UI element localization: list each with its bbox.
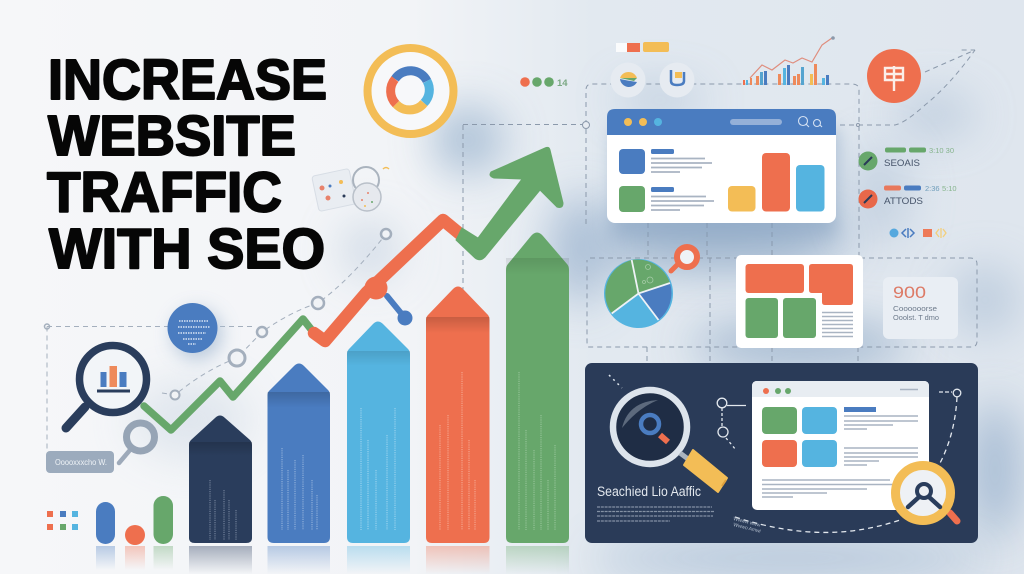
legend item: seoais: 3:10 30 [929, 146, 954, 155]
grey label [46, 451, 114, 473]
results window [752, 381, 929, 510]
bar: orange [426, 286, 490, 574]
status dots: 14 [557, 78, 568, 89]
bar: cyan [347, 322, 410, 574]
panel caption [597, 507, 714, 521]
title: TRAFFIC [47, 160, 282, 224]
orange round icon [867, 49, 921, 103]
curve note: Wwww www [733, 516, 761, 529]
icon: grey magnifier [119, 423, 154, 463]
curve note [733, 516, 761, 535]
title [47, 48, 327, 280]
icon: card and padlock [312, 167, 389, 212]
top color chips [616, 42, 669, 52]
connector nodes [717, 389, 961, 532]
title: WEBSITE [48, 104, 296, 167]
trend arrow [144, 147, 563, 430]
legend icons [890, 228, 946, 238]
small pills and dots [47, 496, 173, 570]
legend item: attods: ATTODS [884, 196, 923, 207]
legend item: attods: 2:36 [925, 184, 940, 193]
round icons [610, 62, 694, 98]
stat card [883, 277, 958, 339]
stat card: Coooooorse [893, 304, 937, 313]
bar: navy [189, 416, 252, 574]
stat card: Ooolst. T dmo [893, 313, 939, 322]
legend item: attods: 5:10 [942, 184, 957, 193]
legend item: attods [858, 184, 957, 208]
search magnifier [609, 375, 727, 492]
dashed connector grid [463, 50, 977, 363]
window bar chart [728, 153, 824, 212]
title: INCREASE [48, 48, 327, 111]
panel heading: Seachied Lio Aaffic [597, 484, 701, 499]
bar: green [506, 232, 569, 574]
blue info circle [168, 303, 222, 359]
icon: donut badge [368, 48, 454, 134]
growth bars [189, 232, 569, 574]
icon: magnifier with bar chart [66, 346, 146, 428]
layout card [736, 255, 863, 348]
grey label: Ooooxxxcho W. [55, 457, 107, 467]
title: WITH SEO [49, 217, 325, 280]
status dots [520, 77, 568, 89]
browser window: dashboard [607, 109, 838, 236]
stat card: 900 [893, 283, 926, 302]
curve note: Wwwo Amwi [733, 522, 761, 535]
window content rows [619, 149, 714, 212]
dark search panel [585, 363, 978, 543]
legend item: seoais [858, 146, 954, 170]
yellow magnifier [896, 466, 957, 521]
dashed node [582, 122, 860, 128]
bar: blue [268, 364, 330, 574]
side legend [858, 146, 957, 238]
pie chart [604, 259, 673, 328]
legend item: seoais: SEOAIS [884, 158, 920, 169]
mini bar and line chart [743, 36, 835, 85]
dashed trend path with nodes [44, 229, 391, 450]
icon: orange magnifier [671, 247, 697, 271]
